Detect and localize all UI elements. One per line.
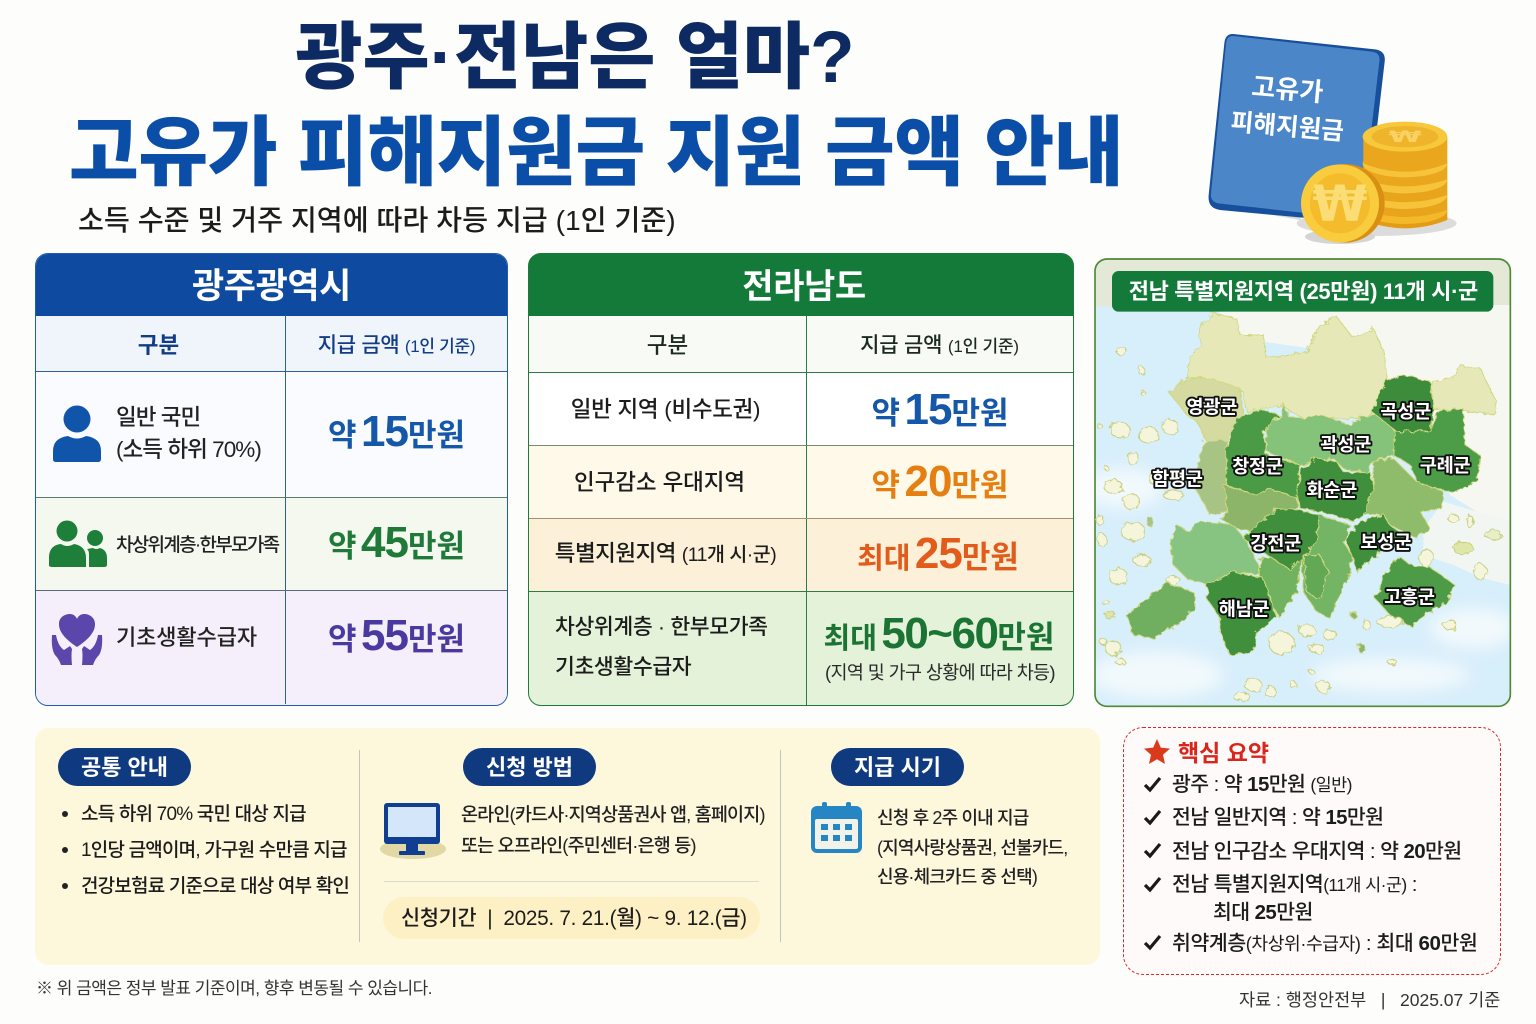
row label: general citizens: 일반 국민: [116, 405, 200, 430]
summary: vulnerable groups: 취약계층(차상위·수급자) : 최대 60만원: [1172, 932, 1477, 955]
icon: support card and coins: 고유가: [1250, 71, 1325, 107]
row label: near-poor and single parent: 차상위계층·한부모가족: [116, 535, 278, 556]
amount: about 20: 약 20만원: [872, 457, 1008, 506]
row label: general region: 일반 지역 (비수도권): [571, 397, 760, 422]
icon: support card and coins: ₩: [1389, 127, 1422, 146]
text: payment timing: [877, 808, 1067, 887]
pill: payment timing: 지급 시기: [854, 755, 941, 780]
panel: Gwangju table: [35, 253, 508, 706]
table rules: Gwangju: [36, 315, 507, 704]
map region labels: 고흥군: [1384, 586, 1435, 607]
map region labels: 해남군: [1219, 598, 1269, 619]
pill: application period: [383, 897, 760, 939]
text: payment timing: (지역사랑상품권, 선불카드,: [877, 838, 1067, 858]
map islands: [1096, 347, 1502, 701]
icon: calendar: [811, 802, 862, 853]
footnote: ※ 위 금액은 정부 발표 기준이며, 향후 변동될 수 있습니다.: [36, 979, 432, 998]
amount: about 15: 약 15만원: [872, 385, 1008, 434]
pill: application method: [463, 748, 596, 786]
summary: up to 25: 최대 25만원: [1213, 901, 1313, 924]
list: common notice: 1인당 금액이며, 가구원 수만큼 지급: [81, 840, 347, 861]
pill: common notice: [58, 748, 191, 786]
summary: Jeonnam special: 전남 특별지원지역(11개 시·군) :: [1172, 873, 1417, 896]
text: application period: 신청기간 | 2025. 7. 21.(월) ~ 9. 12.(금): [401, 907, 747, 930]
icon: family: [49, 520, 107, 567]
summary: Jeonnam general: 전남 일반지역 : 약 15만원: [1172, 806, 1383, 829]
panel: Jeonnam table: [528, 253, 1074, 706]
row label: vulnerable groups: 차상위계층 · 한부모가족: [555, 614, 768, 639]
map regions: [1127, 313, 1497, 655]
map header text: 전남 특별지원지역 (25만원) 11개 시·군: [1129, 279, 1478, 304]
amount: up to 25: 최대 25만원: [857, 529, 1019, 578]
text: application method: 또는 오프라인(주민센터·은행 등): [461, 835, 696, 856]
map header pill: [1112, 271, 1493, 312]
amount: up to 50 to 60: 최대 50~60만원: [824, 609, 1054, 658]
summary: Gwangju: 광주 : 약 15만원 (일반): [1172, 773, 1352, 796]
row label: vulnerable groups: [555, 614, 768, 679]
map region labels: 함평군: [1152, 468, 1203, 489]
icon: heart in hands: [52, 614, 102, 665]
panel: special region map: [1094, 258, 1512, 708]
map region labels: 화순군: [1306, 480, 1357, 501]
divider lines: [359, 750, 781, 942]
pill: payment timing: [831, 748, 964, 786]
source: 자료 : 행정안전부 | 2025.07 기준: [1239, 990, 1500, 1010]
map region labels: 창정군: [1232, 456, 1283, 477]
panel: bottom information: [35, 728, 1100, 965]
map region labels: 곡성군: [1380, 401, 1431, 422]
column header: category: 구분: [647, 333, 688, 358]
pill: application method: 신청 방법: [486, 755, 573, 780]
row label: special support region: 특별지원지역 (11개 시·군): [555, 541, 776, 566]
row label: general citizens: [116, 405, 261, 462]
column header: category: 구분: [138, 333, 179, 358]
column header: amount: 지급 금액 (1인 기준): [860, 334, 1019, 357]
panel: key summary: [1123, 727, 1501, 975]
text: payment timing: 신용·체크카드 중 선택): [877, 867, 1037, 887]
row label: basic livelihood recipients: 기초생활수급자: [116, 625, 257, 650]
subtitle: 소득 수준 및 거주 지역에 따라 차등 지급 (1인 기준): [78, 204, 676, 236]
heading: Gwangju: 광주광역시: [192, 267, 351, 306]
icon: support card and coins: 피해지원금: [1230, 108, 1345, 146]
heading: key summary: 핵심 요약: [1178, 740, 1269, 766]
list: common notice: 소득 하위 70% 국민 대상 지급: [81, 804, 306, 825]
amount: about 55: 약 55만원: [328, 611, 465, 660]
map region labels: 구례군: [1420, 455, 1470, 476]
amount: about 45: 약 45만원: [328, 518, 465, 567]
pill: common notice: 공통 안내: [81, 755, 168, 780]
title line 1: 광주·전남은 얼마?: [295, 17, 855, 98]
icon: person: [53, 406, 101, 462]
title line 2: 고유가 피해지원금 지원 금액 안내: [69, 111, 1123, 196]
map region labels: [1152, 396, 1470, 619]
icon: support card and coins: [1208, 34, 1457, 244]
list: common notice: [62, 804, 349, 897]
Jeonnam table rules: [529, 316, 1073, 705]
column header: amount: 지급 금액 (1인 기준): [318, 334, 475, 357]
map region labels: 곽성군: [1320, 434, 1371, 455]
map region labels: 영광군: [1186, 396, 1237, 417]
icon: star: [1144, 739, 1170, 764]
summary: Jeonnam population decline: 전남 인구감소 우대지역 : 약 20만원: [1172, 840, 1462, 863]
text: payment timing: 신청 후 2주 이내 지급: [877, 808, 1028, 828]
map region labels: 강전군: [1250, 533, 1301, 554]
icon: monitor: [380, 803, 446, 859]
map region labels: 보성군: [1360, 532, 1411, 553]
Gwangju row backgrounds: [36, 254, 507, 705]
icon: support card and coins: ₩: [1312, 175, 1368, 233]
row label: vulnerable groups: 기초생활수급자: [555, 654, 691, 679]
heading: Jeonnam: 전라남도: [742, 268, 866, 306]
list: common notice: 건강보험료 기준으로 대상 여부 확인: [81, 876, 349, 897]
text: application method: 온라인(카드사·지역상품권사 앱, 홈페이지): [461, 804, 765, 825]
note: varies by region: (지역 및 가구 상황에 따라 차등): [825, 662, 1055, 683]
summary checklist: [1144, 777, 1162, 950]
amount: about 15: 약 15만원: [328, 407, 465, 456]
row label: general citizens: (소득 하위 70%): [116, 437, 261, 462]
text: application method: [461, 804, 765, 856]
row label: population decline: 인구감소 우대지역: [574, 470, 745, 495]
